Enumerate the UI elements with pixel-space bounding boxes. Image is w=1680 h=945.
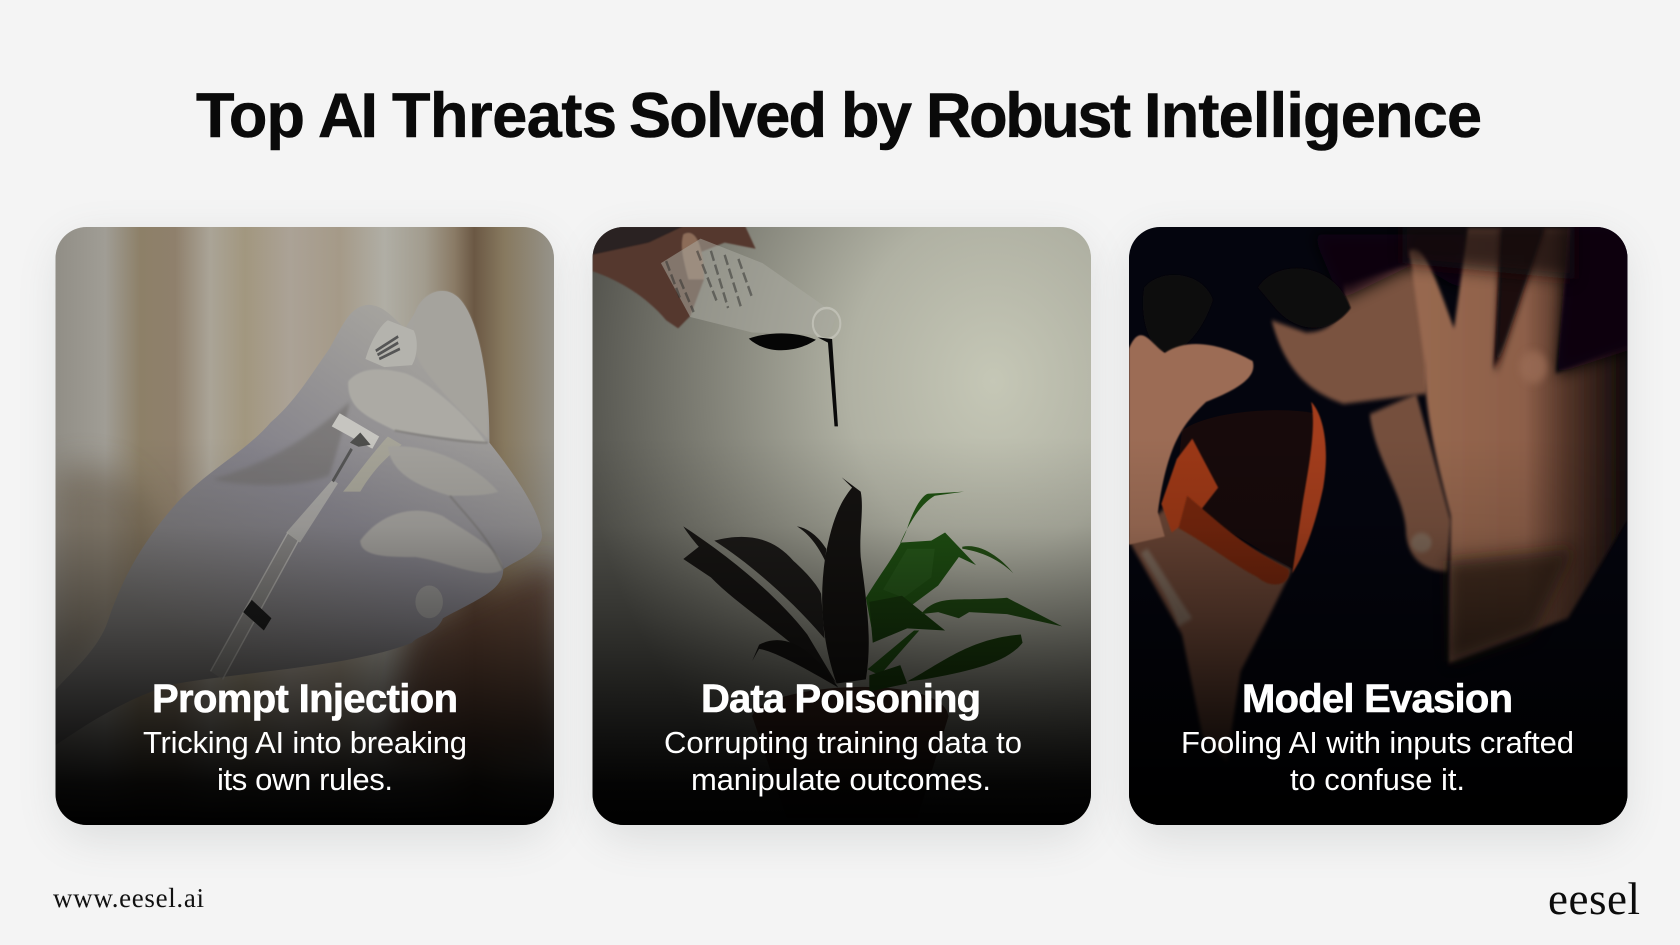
hair [1258,268,1351,328]
title: AI [318,81,378,151]
card text: model evasion: to confuse it. [1290,762,1465,797]
title: Intelligence [1144,81,1482,151]
panel: prompt injection [50,227,557,838]
title: by [841,81,912,151]
title: Threats [392,81,617,151]
title [196,81,1482,151]
card text: data poisoning [664,677,1022,797]
card text: model evasion: Fooling AI with inputs crafted [1181,725,1574,760]
photo: bottle pouring on plant [590,226,1093,826]
hand [592,226,756,328]
footer logo: eesel [1548,874,1640,924]
title: Top [196,81,305,151]
bottle [661,239,840,339]
photo: person holding head [1129,222,1633,825]
card text: data poisoning: Corrupting training data to [664,725,1022,760]
footer url: www.eesel.ai [53,883,204,913]
card text: data poisoning: manipulate outcomes. [691,762,991,797]
right hand [1402,222,1633,663]
title: Solved [629,81,827,151]
panel: data poisoning [590,226,1093,838]
poison [749,333,838,426]
card text: model evasion [1181,677,1574,797]
plant [683,477,1062,692]
card text: prompt injection: Tricking AI into breaking [143,725,467,760]
panel: model evasion [1129,222,1633,838]
card text: model evasion: Model Evasion [1242,677,1513,721]
syringe [210,320,417,679]
photo: gloved hand with syringe [50,227,557,825]
card text: prompt injection [143,677,467,797]
card text: data poisoning: Data Poisoning [701,677,981,721]
card text: prompt injection: Prompt Injection [152,677,458,721]
face [1272,263,1430,404]
card text: prompt injection: its own rules. [217,762,393,797]
left hand [1129,335,1326,761]
pot [752,686,948,764]
title: Robust [926,81,1131,151]
glove [50,291,542,749]
